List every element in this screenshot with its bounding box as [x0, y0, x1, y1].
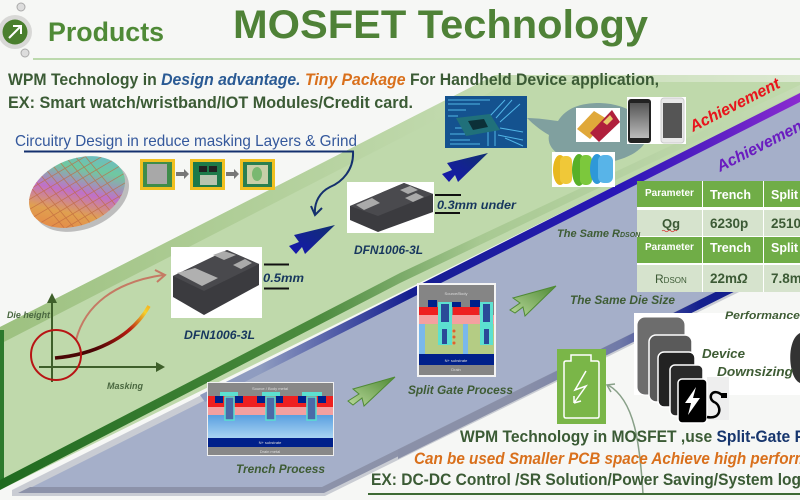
- dimension: 0.3mm under: 0.3mm under: [437, 200, 517, 212]
- chip: DFN1006-3L 0.5mm: [171, 247, 262, 318]
- conclusion text: [371, 427, 800, 489]
- intro text: EX: Smart watch/wristband/IOT Modules/Credit card.: [8, 93, 413, 112]
- title: MOSFET Technology: [233, 3, 649, 47]
- icon: wristbands: [552, 152, 615, 187]
- table: parameters: Qg: [662, 216, 680, 231]
- arrow: blue lower: [289, 225, 335, 254]
- diagram: trench cross-section: [207, 382, 334, 456]
- label: trench process: Trench Process: [236, 464, 325, 476]
- intro text: WPM Technology in Design advantage. Tiny Package For Handheld Device application,: [8, 70, 659, 89]
- intro text: [8, 70, 659, 112]
- label: the same die size: The Same Die Size: [570, 295, 676, 307]
- arrow: curved to battery: [607, 384, 643, 494]
- chart: die height vs masking: [7, 270, 165, 392]
- header rule: [33, 58, 800, 60]
- diagram: trench cross-section: N+ substrate: [259, 440, 282, 445]
- chip: DFN1006-3L 0.3mm: [347, 182, 434, 233]
- chip photo: [445, 96, 527, 148]
- chart: die height vs masking: Masking: [107, 381, 143, 392]
- circuitry design heading: Circuitry Design in reduce masking Layers & Grind: [15, 133, 357, 150]
- footer rule: [368, 493, 800, 495]
- table: parameters: Split: [771, 241, 799, 255]
- label: device downsizing: Downsizing: [717, 365, 793, 379]
- label: DFN1006-3L lower: DFN1006-3L: [184, 330, 255, 342]
- icon: battery: [557, 349, 606, 424]
- table: parameters: Split: [771, 188, 799, 202]
- label: performance: Performance: [725, 310, 800, 322]
- arrow: green lower: [348, 377, 395, 406]
- diagram: split gate cross-section: Drain: [451, 367, 461, 372]
- wafer: [29, 156, 129, 232]
- arrow: circuitry to package: [24, 152, 353, 215]
- table: parameters: Trench: [710, 241, 751, 255]
- table: parameters: Trench: [710, 188, 751, 202]
- arrow: blue upper: [442, 153, 488, 182]
- diagram: split gate cross-section: N+ substrate: [445, 358, 468, 363]
- icon: products arrow badge: [0, 3, 32, 57]
- dimension: 0.3mm under: [435, 195, 517, 213]
- icon: phones: [627, 97, 686, 144]
- diagram: trench cross-section: Drain metal: [260, 449, 280, 454]
- table: parameters: Parameter: [645, 242, 694, 253]
- chart: die height vs masking: Die height: [7, 310, 51, 321]
- dimension: 0.5mm: [263, 264, 304, 288]
- device downsizing panel: [634, 313, 800, 423]
- process chips: [140, 159, 275, 190]
- diagram: trench cross-section: Source / Body metal: [252, 386, 288, 391]
- table: parameters: Parameter: [645, 188, 694, 199]
- diagram: split gate cross-section: Source/Body: [445, 291, 467, 296]
- achievement label red: Achievement: [686, 75, 784, 136]
- label: device downsizing: [702, 347, 793, 379]
- label: device downsizing: Device: [702, 347, 745, 361]
- table: parameters: 6230p: [710, 216, 748, 231]
- table: parameters: 22mΩ: [710, 271, 748, 286]
- dimension: 0.5mm: 0.5mm: [263, 273, 304, 285]
- label: DFN1006-3L upper: DFN1006-3L: [354, 245, 423, 257]
- label: split gate process: Split Gate Process: [408, 385, 513, 397]
- icon: credit cards: [576, 108, 620, 142]
- table: parameters: [637, 181, 800, 292]
- label: the same rdson: The Same RDSON: [557, 228, 641, 240]
- speech bubble: [527, 103, 647, 163]
- blue panel: [12, 93, 800, 496]
- table: parameters: RDSON: [655, 272, 687, 286]
- arrow: green upper: [510, 286, 556, 316]
- diagram: split gate cross-section: [417, 283, 496, 377]
- heading: products: Products: [48, 17, 164, 47]
